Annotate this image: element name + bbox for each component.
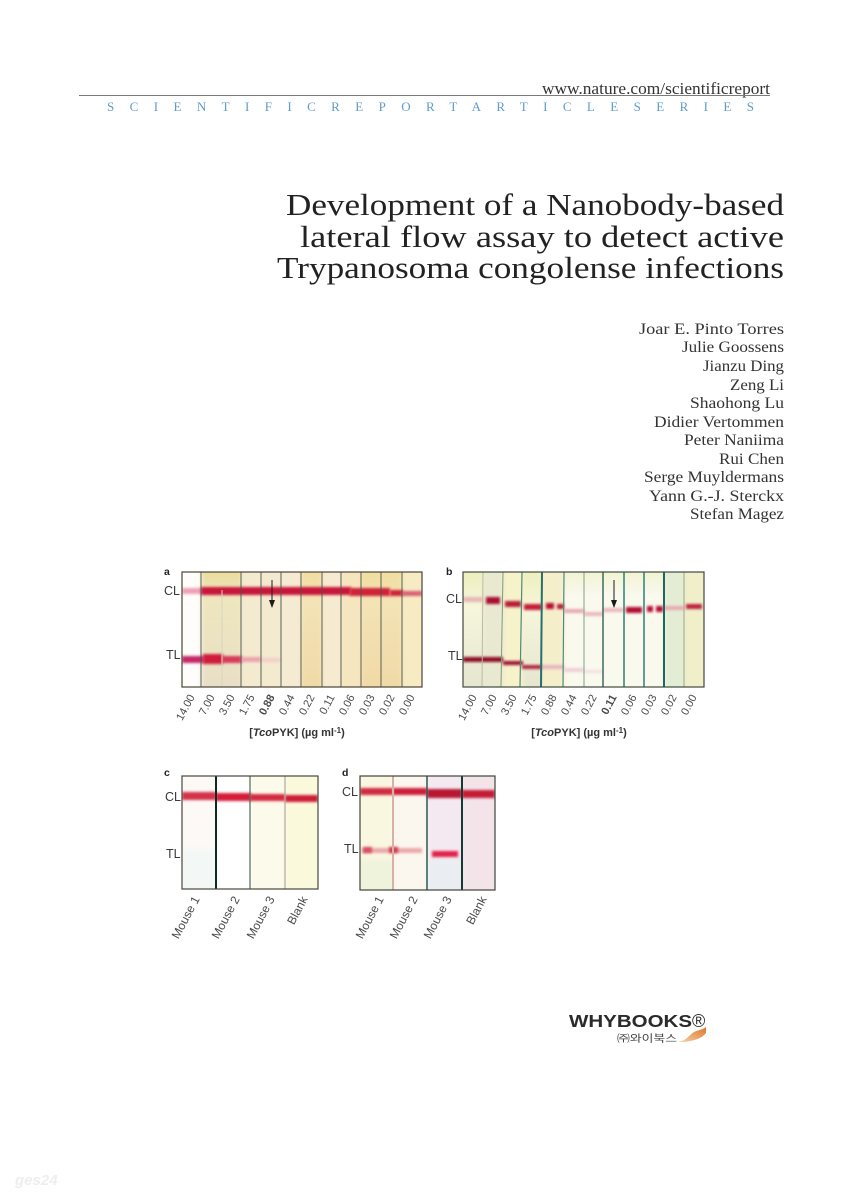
strip row labels a: CL bbox=[164, 584, 180, 598]
publisher logo: ® bbox=[692, 1011, 705, 1031]
publisher logo: ㈜와이북스 bbox=[617, 1032, 677, 1045]
watermark: ges24 bbox=[14, 1172, 58, 1189]
tick labels c: Mouse 2 bbox=[209, 894, 243, 941]
tick labels b: 0.06 bbox=[619, 693, 640, 717]
control lines bbox=[182, 588, 202, 594]
strip row labels d: CL bbox=[342, 785, 358, 799]
tick labels c: Mouse 3 bbox=[244, 894, 278, 941]
tick labels b: 3.50 bbox=[499, 693, 520, 717]
panel letter d: d bbox=[342, 767, 348, 779]
tick labels b: 1.75 bbox=[519, 693, 540, 717]
axis label a: -1 bbox=[334, 726, 342, 735]
tick labels a: 14.00 bbox=[174, 693, 198, 723]
tick labels b: 7.00 bbox=[479, 693, 500, 717]
authors: Julie Goossens bbox=[682, 339, 784, 356]
title: Trypanosoma congolense infections bbox=[277, 250, 784, 285]
tick labels b: 0.44 bbox=[559, 693, 580, 717]
strips a bbox=[182, 572, 422, 686]
tick labels b: 14.00 bbox=[456, 693, 480, 723]
strips d bbox=[360, 776, 494, 890]
frame c bbox=[182, 776, 318, 889]
authors: Rui Chen bbox=[719, 451, 784, 468]
authors: Yann G.-J. Sterckx bbox=[649, 488, 784, 505]
publisher logo bbox=[569, 1011, 706, 1045]
authors: Jianzu Ding bbox=[703, 358, 784, 375]
strip row labels c bbox=[165, 790, 181, 861]
authors: Serge Muyldermans bbox=[644, 469, 784, 486]
tick labels b: 0.03 bbox=[639, 693, 660, 717]
dividers bbox=[201, 572, 402, 687]
tick labels b: 0.11 bbox=[599, 693, 620, 717]
tick labels a: 0.11 bbox=[317, 693, 338, 717]
panel c: mouse strips bbox=[164, 765, 328, 941]
test lines bbox=[182, 656, 204, 663]
tick labels c bbox=[169, 893, 311, 941]
tick labels b: 0.00 bbox=[679, 693, 700, 717]
strips c bbox=[182, 776, 318, 888]
tick labels a: 0.88 bbox=[257, 693, 278, 717]
tick labels d: Mouse 2 bbox=[387, 894, 421, 941]
authors: Joar E. Pinto Torres bbox=[639, 321, 784, 338]
logo swoosh bbox=[678, 1027, 706, 1042]
strip row labels c: CL bbox=[165, 790, 181, 804]
axis label b: ) bbox=[623, 727, 627, 739]
tick labels b: 0.22 bbox=[579, 693, 600, 717]
panel d: mouse strips bbox=[342, 765, 505, 941]
control lines bbox=[463, 597, 483, 602]
tick labels a: 0.03 bbox=[357, 693, 378, 717]
axis label b: -1 bbox=[616, 726, 624, 735]
strip row labels a: TL bbox=[166, 648, 181, 662]
panel letter a: a bbox=[164, 566, 170, 578]
frame a bbox=[182, 572, 422, 687]
tick labels a: 0.06 bbox=[337, 693, 358, 717]
header rule bbox=[79, 95, 770, 96]
tick labels b: 0.88 bbox=[539, 693, 560, 717]
title: lateral flow assay to detect active bbox=[300, 219, 784, 254]
authors: Peter Naniima bbox=[684, 432, 784, 449]
panel a: concentration series strips bbox=[164, 560, 432, 739]
tick labels b bbox=[456, 693, 700, 723]
strip row labels c: TL bbox=[166, 847, 181, 861]
panel b: concentration series strips bbox=[446, 560, 720, 739]
title bbox=[277, 187, 785, 285]
tick labels a: 3.50 bbox=[217, 693, 238, 717]
dividers bbox=[482, 572, 483, 687]
authors bbox=[639, 321, 785, 523]
tick labels a: 0.02 bbox=[377, 693, 398, 717]
tick labels a: 0.44 bbox=[277, 693, 298, 717]
strip row labels d: TL bbox=[344, 842, 359, 856]
authors: Didier Vertommen bbox=[654, 414, 784, 431]
arrow a bbox=[269, 580, 275, 608]
tick labels a: 1.75 bbox=[237, 693, 258, 717]
arrow b bbox=[611, 580, 617, 608]
panel letter c: c bbox=[164, 767, 170, 779]
strip row labels d bbox=[342, 785, 359, 856]
tick labels a: 7.00 bbox=[197, 693, 218, 717]
panel letter b: b bbox=[446, 566, 452, 578]
tick labels a: 0.22 bbox=[297, 693, 318, 717]
tick labels c: Blank bbox=[284, 893, 311, 927]
title: Development of a Nanobody-based bbox=[286, 187, 785, 222]
authors: Zeng Li bbox=[730, 377, 785, 394]
frame d bbox=[360, 776, 495, 890]
test lines bbox=[463, 657, 503, 662]
website url: www.nature.com/scientificreport bbox=[542, 79, 770, 98]
tick labels c: Mouse 1 bbox=[169, 894, 203, 941]
strip row labels b bbox=[446, 592, 463, 663]
series banner: SCIENTIFICREPORTARTICLESERIES bbox=[107, 99, 754, 114]
tick labels a bbox=[174, 693, 418, 723]
tick labels b: 0.02 bbox=[659, 693, 680, 717]
authors: Stefan Magez bbox=[690, 506, 784, 523]
publisher logo: WHYBOOKS bbox=[569, 1011, 692, 1031]
strips b bbox=[464, 572, 704, 686]
tick labels d: Mouse 3 bbox=[421, 894, 455, 941]
axis label a: [TcoPYK] (µg ml bbox=[249, 727, 334, 739]
strip row labels a bbox=[164, 584, 181, 662]
tick labels d: Blank bbox=[463, 893, 490, 927]
axis label a: ) bbox=[341, 727, 345, 739]
strip row labels b: CL bbox=[446, 592, 462, 606]
strip row labels b: TL bbox=[448, 649, 463, 663]
tick labels d: Mouse 1 bbox=[353, 894, 387, 941]
frame b bbox=[463, 572, 704, 687]
tick labels a: 0.00 bbox=[397, 693, 418, 717]
authors: Shaohong Lu bbox=[690, 395, 784, 412]
axis label b: [TcoPYK] (µg ml bbox=[531, 727, 616, 739]
tick labels d bbox=[353, 893, 490, 941]
